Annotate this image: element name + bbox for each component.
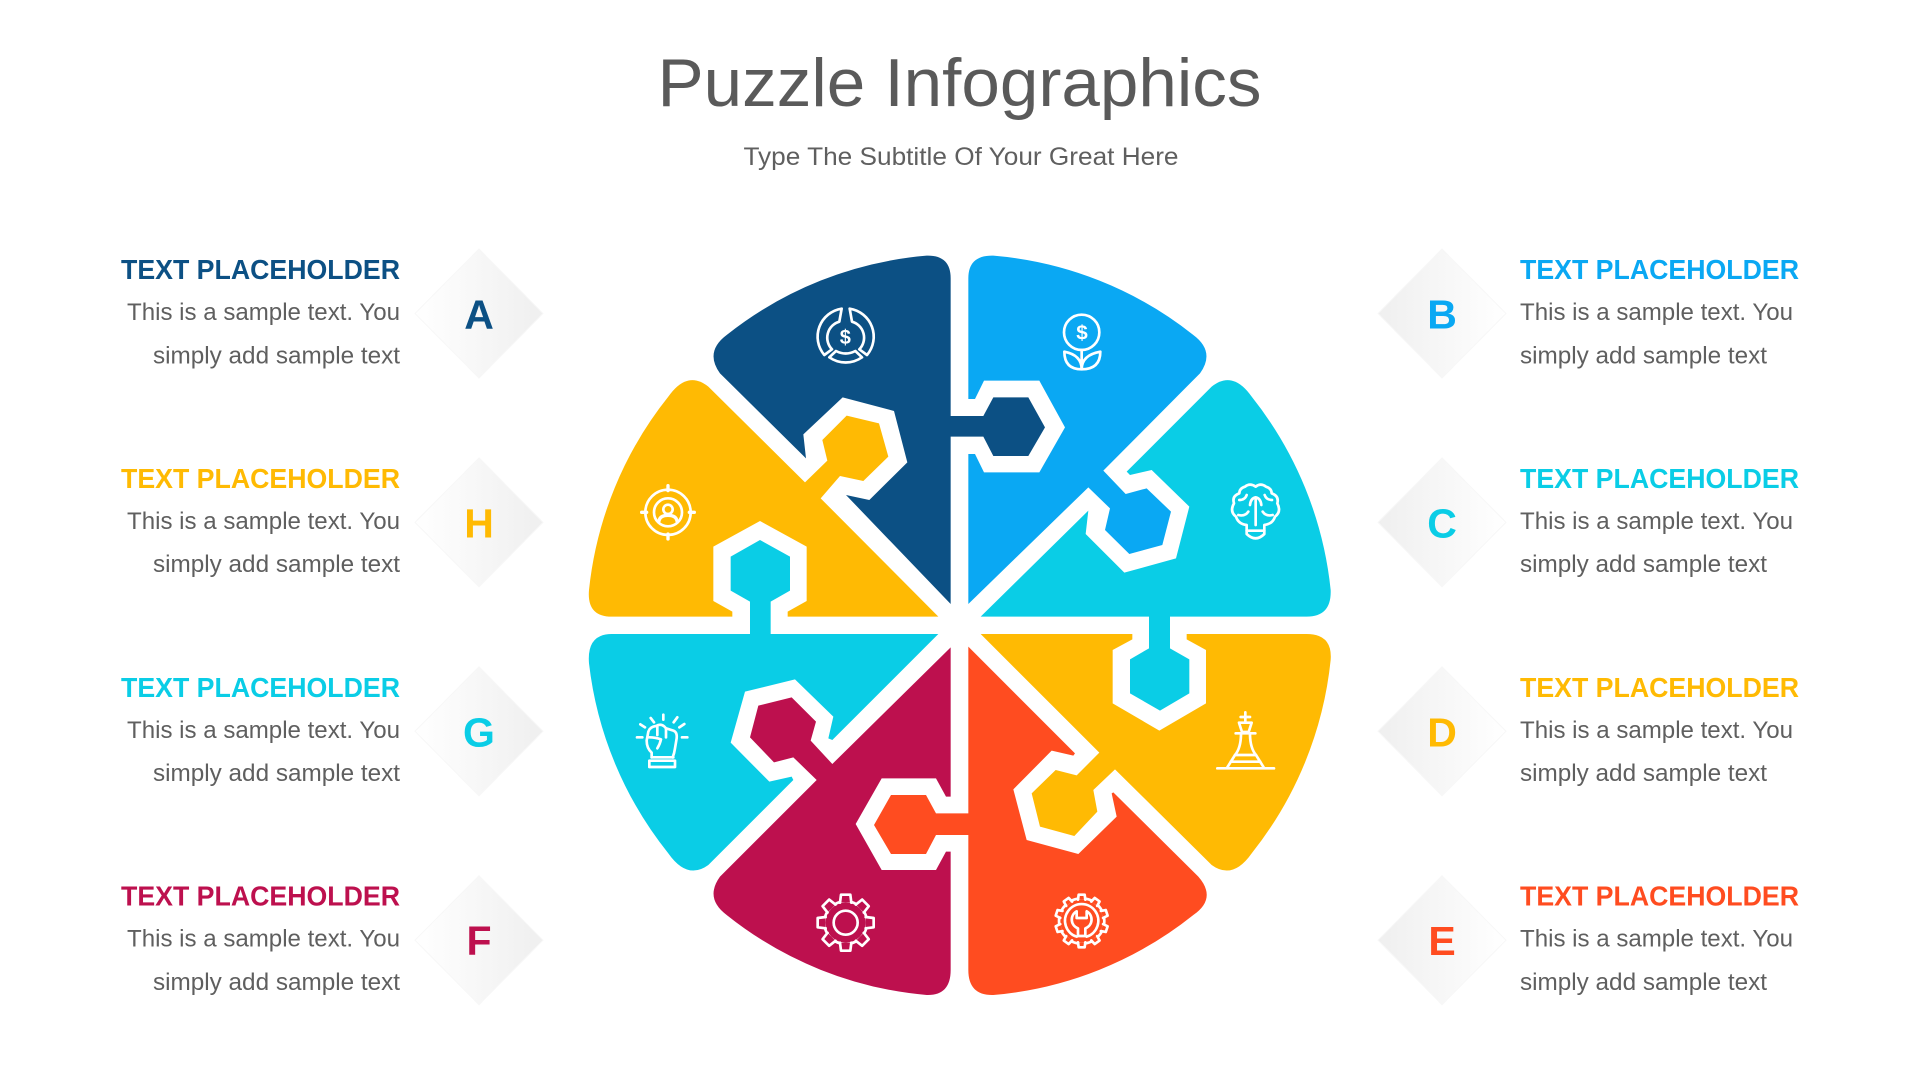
body text G: This is a sample text. You <box>127 717 400 744</box>
puzzle piece G: teal <box>589 540 938 871</box>
icon: dollar segments <box>818 309 874 363</box>
badge B <box>1378 249 1506 378</box>
title: Puzzle Infographics <box>658 45 1262 121</box>
subtitle: Type The Subtitle Of Your Great Here <box>744 143 1178 171</box>
body text C <box>1520 508 1793 578</box>
icon: money plant <box>1064 315 1100 369</box>
badge C: C <box>1427 500 1457 546</box>
puzzle piece F: crimson <box>714 647 951 995</box>
heading B: TEXT PLACEHOLDER <box>1520 254 1799 285</box>
puzzle piece E: orange <box>874 647 1207 995</box>
body text D: simply add sample text <box>1520 760 1767 787</box>
right row B <box>1378 249 1799 378</box>
badge H <box>415 458 543 587</box>
body text B: simply add sample text <box>1520 342 1767 369</box>
badge H: H <box>464 500 494 546</box>
heading H: TEXT PLACEHOLDER <box>121 463 400 494</box>
heading F: TEXT PLACEHOLDER <box>121 881 400 912</box>
heading C: TEXT PLACEHOLDER <box>1520 463 1799 494</box>
right row D <box>1378 667 1799 796</box>
body text H <box>127 508 400 578</box>
icon: money plant: $ <box>1076 322 1088 345</box>
body text G: simply add sample text <box>153 760 400 787</box>
badge A <box>415 249 543 378</box>
badge F <box>415 876 543 1005</box>
body text E <box>1520 926 1793 996</box>
badge G: G <box>463 709 495 755</box>
body text F: This is a sample text. You <box>127 926 400 953</box>
badge D: D <box>1427 709 1457 755</box>
puzzle wheel <box>589 256 1331 995</box>
left row F <box>121 876 543 1005</box>
body text E: simply add sample text <box>1520 969 1767 996</box>
heading G: TEXT PLACEHOLDER <box>121 672 400 703</box>
badge C <box>1378 458 1506 587</box>
badge E: E <box>1428 918 1456 964</box>
body text G <box>127 717 400 787</box>
badge B: B <box>1427 292 1457 338</box>
icon: chess king <box>1217 712 1274 768</box>
badge D <box>1378 667 1506 796</box>
body text A: This is a sample text. You <box>127 299 400 326</box>
body text C: This is a sample text. You <box>1520 508 1793 535</box>
left row G <box>121 667 543 796</box>
badge F: F <box>466 918 492 964</box>
body text B: This is a sample text. You <box>1520 299 1793 326</box>
body text F: simply add sample text <box>153 969 400 996</box>
puzzle piece A: navy <box>714 256 1045 604</box>
icon: dollar segments: $ <box>840 327 851 349</box>
puzzle piece D: amber <box>981 634 1331 871</box>
body text E: This is a sample text. You <box>1520 926 1793 953</box>
body text H: This is a sample text. You <box>127 508 400 535</box>
right row C <box>1378 458 1799 587</box>
heading E: TEXT PLACEHOLDER <box>1520 881 1799 912</box>
icon: raised fist <box>637 715 687 767</box>
left row A <box>121 249 543 378</box>
badge E <box>1378 876 1506 1005</box>
left row H <box>121 458 543 587</box>
puzzle piece H: amber <box>589 380 938 617</box>
body text H: simply add sample text <box>153 551 400 578</box>
icon: gear <box>818 895 874 951</box>
badge A: A <box>464 292 494 338</box>
puzzle piece B: blue <box>968 256 1206 604</box>
heading D: TEXT PLACEHOLDER <box>1520 672 1799 703</box>
icon: brain bulb <box>1232 485 1279 538</box>
body text F <box>127 926 400 996</box>
body text B <box>1520 299 1793 369</box>
icon: wrench gear <box>1055 895 1108 947</box>
heading A: TEXT PLACEHOLDER <box>121 254 400 285</box>
body text D: This is a sample text. You <box>1520 717 1793 744</box>
icon: target person <box>642 486 694 539</box>
right row E <box>1378 876 1799 1005</box>
body text D <box>1520 717 1793 787</box>
puzzle piece C: teal <box>981 380 1331 711</box>
badge G <box>415 667 543 796</box>
body text A: simply add sample text <box>153 342 400 369</box>
body text A <box>127 299 400 369</box>
body text C: simply add sample text <box>1520 551 1767 578</box>
